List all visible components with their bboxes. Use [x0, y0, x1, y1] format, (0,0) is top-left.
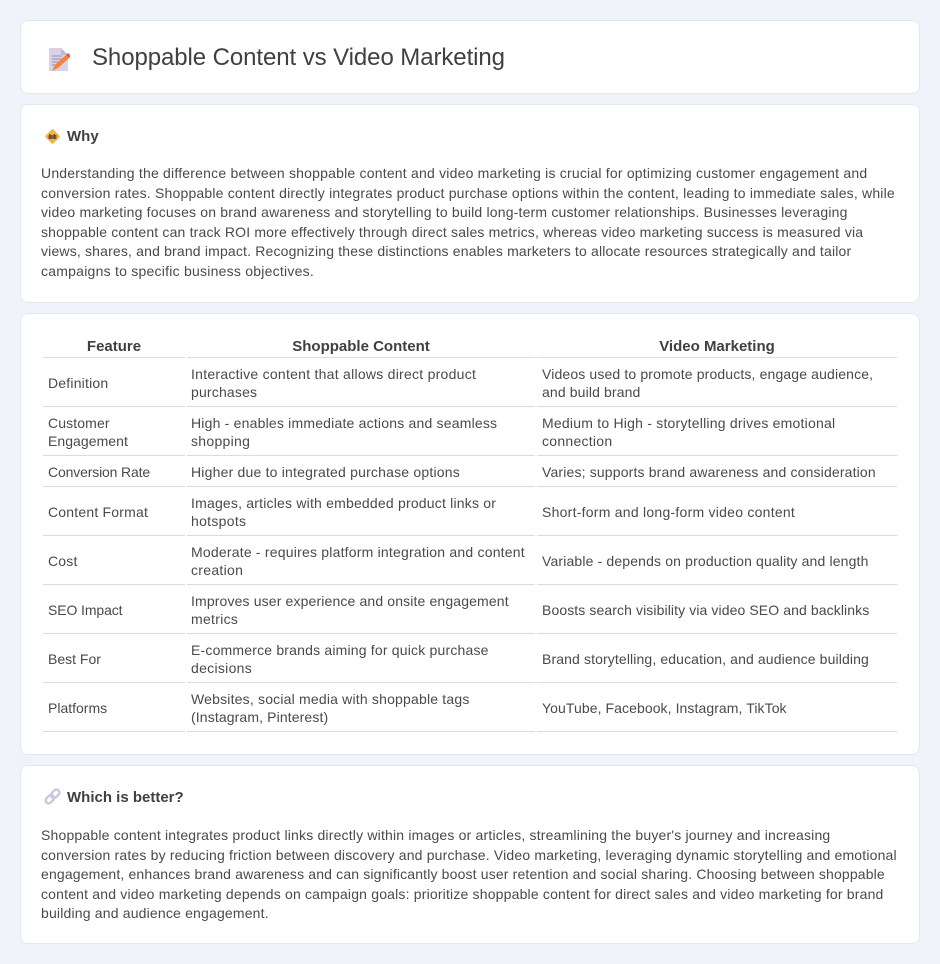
row: seo impact: Improves user experience and onsite engagement [191, 593, 509, 609]
row: content format: Short-form and long-form video content [542, 504, 795, 520]
row: seo impact: SEO Impact [48, 602, 122, 618]
row: best for: E-commerce brands aiming for quick purchase [191, 642, 489, 658]
row: best for: Brand storytelling, education, and audience building [542, 651, 869, 667]
row: best for: decisions [191, 660, 252, 676]
row: content format [48, 495, 795, 529]
table header: Video Marketing [659, 338, 775, 355]
text block: which is better paragraph: Shoppable content integrates product links directly within images or articles, streamlining the buyer's journey and increasing [41, 827, 830, 843]
text block: which is better paragraph [41, 827, 897, 921]
row: platforms: (Instagram, Pinterest) [191, 709, 328, 725]
text block: why paragraph [41, 165, 895, 279]
row: definition: Videos used to promote products, engage audience, [542, 366, 873, 382]
row: customer engagement: High - enables immediate actions and seamless [191, 415, 497, 431]
row: content format: Content Format [48, 504, 148, 520]
row: definition: Definition [48, 375, 108, 391]
table header: Feature [87, 338, 141, 355]
row: cost: Cost [48, 553, 78, 569]
row: definition [48, 366, 873, 400]
row: platforms: YouTube, Facebook, Instagram, TikTok [542, 700, 787, 716]
row: definition: purchases [191, 384, 257, 400]
row: seo impact: Boosts search visibility via video SEO and backlinks [542, 602, 869, 618]
text block: which is better paragraph: building and audience engagement. [41, 905, 269, 921]
text block: which is better paragraph: engagement, enhances brand awareness and can significantly boost user retention and social sharing. Choosing between shoppable [41, 866, 885, 882]
text block: why paragraph: shoppable content can track ROI more effectively through direct sales metrics, whereas video marketing success is measured via [41, 224, 863, 240]
icon: memo with pencil [49, 48, 70, 71]
row: conversion rate [48, 464, 876, 480]
row: seo impact: metrics [191, 611, 238, 627]
row: cost: creation [191, 562, 243, 578]
title: Shoppable Content vs Video Marketing [92, 44, 505, 71]
text block: why paragraph: video marketing focuses on brand awareness and storytelling to build long-term customer relationships. Businesses leveraging [41, 204, 848, 220]
row: customer engagement: Engagement [48, 433, 128, 449]
row: cost: Variable - depends on production quality and length [542, 553, 869, 569]
text block: why paragraph: conversion rates. Shoppable content directly integrates product purchase options within the content, leading to immediate sales, while [41, 184, 895, 200]
row: platforms: Platforms [48, 700, 107, 716]
row: customer engagement [48, 415, 835, 449]
row: conversion rate: Varies; supports brand awareness and consideration [542, 464, 876, 480]
row: customer engagement: Medium to High - storytelling drives emotional [542, 415, 835, 431]
row: conversion rate: Conversion Rate [48, 464, 150, 480]
heading: why: Why [67, 128, 99, 145]
row: definition: and build brand [542, 384, 640, 400]
panel: title header [20, 20, 920, 94]
table header: Shoppable Content [292, 338, 430, 355]
row: customer engagement: connection [542, 433, 612, 449]
row: best for [48, 642, 869, 676]
row: content format: Images, articles with embedded product links or [191, 495, 496, 511]
icon: link [44, 788, 60, 805]
row: cost: Moderate - requires platform integration and content [191, 544, 525, 560]
row: definition: Interactive content that allows direct product [191, 366, 476, 382]
text block: why paragraph: campaigns to specific business objectives. [41, 262, 314, 278]
table header [87, 338, 775, 355]
row: seo impact [48, 593, 869, 627]
text block: why paragraph: Understanding the difference between shoppable content and video marketing is crucial for optimizing customer engagement and [41, 165, 867, 181]
row: customer engagement: shopping [191, 433, 250, 449]
panel: comparison table [20, 313, 920, 755]
row: platforms [48, 691, 787, 725]
text block: which is better paragraph: content and video marketing depends on campaign goals: prioritize shoppable content for direct sales and video marketing for brand [41, 886, 884, 902]
text block: which is better paragraph: conversion rates by reducing friction between discovery and purchase. Video marketing, leveraging dynamic storytelling and emotional [41, 846, 897, 862]
row: platforms: Websites, social media with shoppable tags [191, 691, 470, 707]
row: best for: Best For [48, 651, 101, 667]
icon: warning diamond [45, 129, 60, 144]
row: cost [48, 544, 869, 578]
heading: which is better: Which is better? [67, 789, 184, 806]
row: content format: hotspots [191, 513, 246, 529]
panel: why [20, 104, 920, 303]
text block: why paragraph: views, shares, and brand impact. Recognizing these distinctions enables marketers to allocate resources strategically and tailor [41, 243, 851, 259]
row: conversion rate: Higher due to integrated purchase options [191, 464, 460, 480]
panel: which is better [20, 765, 920, 944]
row: customer engagement: Customer [48, 415, 110, 431]
